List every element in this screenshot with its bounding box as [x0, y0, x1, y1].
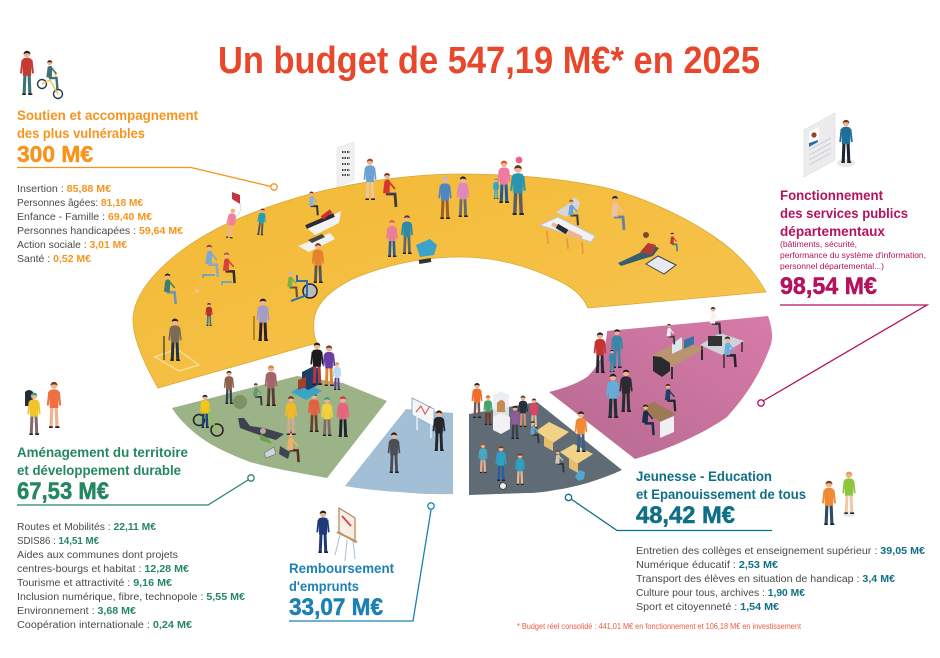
note: performance du système d'information, — [780, 250, 926, 260]
amount: 300 M€ — [17, 141, 93, 167]
icon: wheelchair with carer — [287, 243, 323, 301]
breakdown list: Insertion : 85,88 M€ — [17, 183, 111, 195]
note: (bâtiments, sécurité, — [780, 239, 857, 249]
leader line — [17, 475, 254, 505]
icon: hikers — [286, 393, 348, 437]
icon: desk three — [640, 384, 676, 438]
icon: CV document and woman — [804, 113, 855, 177]
heading: Jeunesse - Education — [636, 468, 772, 484]
icon: old couple — [439, 176, 468, 219]
breakdown list: Coopération internationale : 0,24 M€ — [17, 619, 192, 631]
icon: two hikers — [25, 382, 60, 435]
leader line — [565, 494, 772, 530]
breakdown list: Inclusion numérique, fibre, technopole : 5,55 M€ — [17, 591, 245, 603]
panel: yellow sector, support for the vulnerable — [133, 142, 766, 388]
panel: youth text — [565, 468, 925, 613]
breakdown list — [17, 183, 183, 265]
sector shape — [133, 174, 766, 388]
panel: loan repayment text — [289, 503, 434, 621]
icon: seated women — [203, 245, 235, 285]
icon: whiteboard — [412, 398, 434, 438]
icon: family — [493, 157, 525, 215]
breakdown list: Action sociale : 3,01 M€ — [17, 239, 127, 251]
icon: school desks — [530, 421, 593, 481]
icon: old man with cane — [254, 299, 269, 341]
sector shape — [549, 316, 772, 459]
icon: orange student — [576, 411, 586, 452]
leader line — [289, 503, 434, 621]
icon: kite and running children — [225, 192, 266, 239]
icon: travellers with suitcases — [291, 343, 341, 400]
icon: cyclist — [194, 395, 223, 436]
icon: board game — [618, 232, 677, 274]
panel: blue sector, loan repayment — [345, 398, 453, 494]
panel: grey sector, youth and education — [469, 383, 622, 495]
amount: 98,54 M€ — [780, 273, 877, 300]
breakdown list: Routes et Mobilités : 22,11 M€ — [17, 521, 156, 533]
amount: 67,53 M€ — [17, 478, 109, 505]
note: personnel départemental...) — [780, 261, 884, 271]
heading line two: d'emprunts — [289, 578, 359, 594]
heading line two: des plus vulnérables — [17, 125, 145, 141]
breakdown list: Personnes handicapées : 59,64 M€ — [17, 225, 183, 237]
breakdown list: Santé : 0,52 M€ — [17, 253, 91, 265]
icon: standing colleagues — [594, 329, 632, 418]
icon: desk one — [652, 324, 704, 379]
icon: man and easel — [317, 508, 357, 561]
icon: father and child on bike — [21, 51, 62, 98]
icon: two students — [823, 472, 855, 525]
panel: green sector, territory — [172, 343, 387, 478]
icon: dentist chair — [298, 192, 341, 252]
amount: 33,07 M€ — [289, 594, 383, 621]
amount: 48,42 M€ — [636, 502, 735, 529]
breakdown list: Enfance - Famille : 69,40 M€ — [17, 211, 152, 223]
breakdown list: centres-bourgs et habitat : 12,28 M€ — [17, 563, 189, 575]
icon: old man on hopscotch — [155, 319, 199, 371]
breakdown list: Entretien des collèges et enseignement supérieur : 39,05 M€ — [636, 545, 925, 557]
title: Un budget de 547,19 M€* en 2025 — [218, 40, 760, 82]
breakdown list: Tourisme et attractivité : 9,16 M€ — [17, 577, 172, 589]
icon: couple with pram — [387, 215, 437, 262]
breakdown list — [636, 545, 925, 613]
breakdown list: Sport et citoyenneté : 1,54 M€ — [636, 601, 779, 613]
sector shape — [172, 376, 387, 478]
panel: support for the vulnerable text — [17, 51, 277, 265]
icon: massage table — [540, 197, 595, 254]
icon: lying reader and laptop user — [238, 418, 299, 462]
note — [780, 239, 926, 271]
heading: Fonctionnement — [780, 187, 883, 203]
breakdown list: Environnement : 3,68 M€ — [17, 605, 136, 617]
heading: Aménagement du territoire — [17, 444, 188, 460]
panel: territory text — [17, 382, 254, 631]
sector shape — [345, 409, 453, 494]
breakdown list: Transport des élèves en situation de handicap : 3,4 M€ — [636, 573, 895, 585]
breakdown list: SDIS86 : 14,51 M€ — [17, 535, 99, 547]
breakdown list: Personnes âgées: 81,18 M€ — [17, 197, 143, 209]
panel: public services text — [758, 113, 927, 406]
leader line — [758, 305, 927, 406]
heading line three: départementaux — [780, 223, 885, 239]
icon: presenters — [388, 410, 444, 473]
icon: museum vitrine and visitors — [472, 383, 538, 439]
sector shape — [469, 402, 622, 495]
icon: crouching man, child, ball — [164, 274, 212, 326]
breakdown list: Aides aux communes dont projets — [17, 549, 178, 561]
leader line — [17, 168, 277, 190]
icon: children playing football — [479, 443, 524, 489]
footnote: * Budget réel consolidé : 441,01 M€ en fonctionnement et 106,18 M€ en investissement — [517, 622, 802, 631]
breakdown list: Numérique éducatif : 2,53 M€ — [636, 559, 778, 571]
heading line two: et développement durable — [17, 462, 181, 478]
heading: Remboursement — [289, 560, 394, 576]
icon: people and plants — [224, 365, 276, 409]
panel: pink sector, public services — [549, 307, 772, 459]
heading: Soutien et accompagnement — [17, 107, 198, 123]
heading line two: et Epanouissement de tous — [636, 486, 806, 502]
breakdown list — [17, 521, 245, 631]
heading line two: des services publics — [780, 205, 908, 221]
icon: seated mother with baby — [611, 196, 624, 230]
breakdown list: Culture pour tous, archives : 1,90 M€ — [636, 587, 805, 599]
icon: eye chart and optometrist — [337, 142, 396, 207]
icon: desk two — [700, 307, 744, 368]
